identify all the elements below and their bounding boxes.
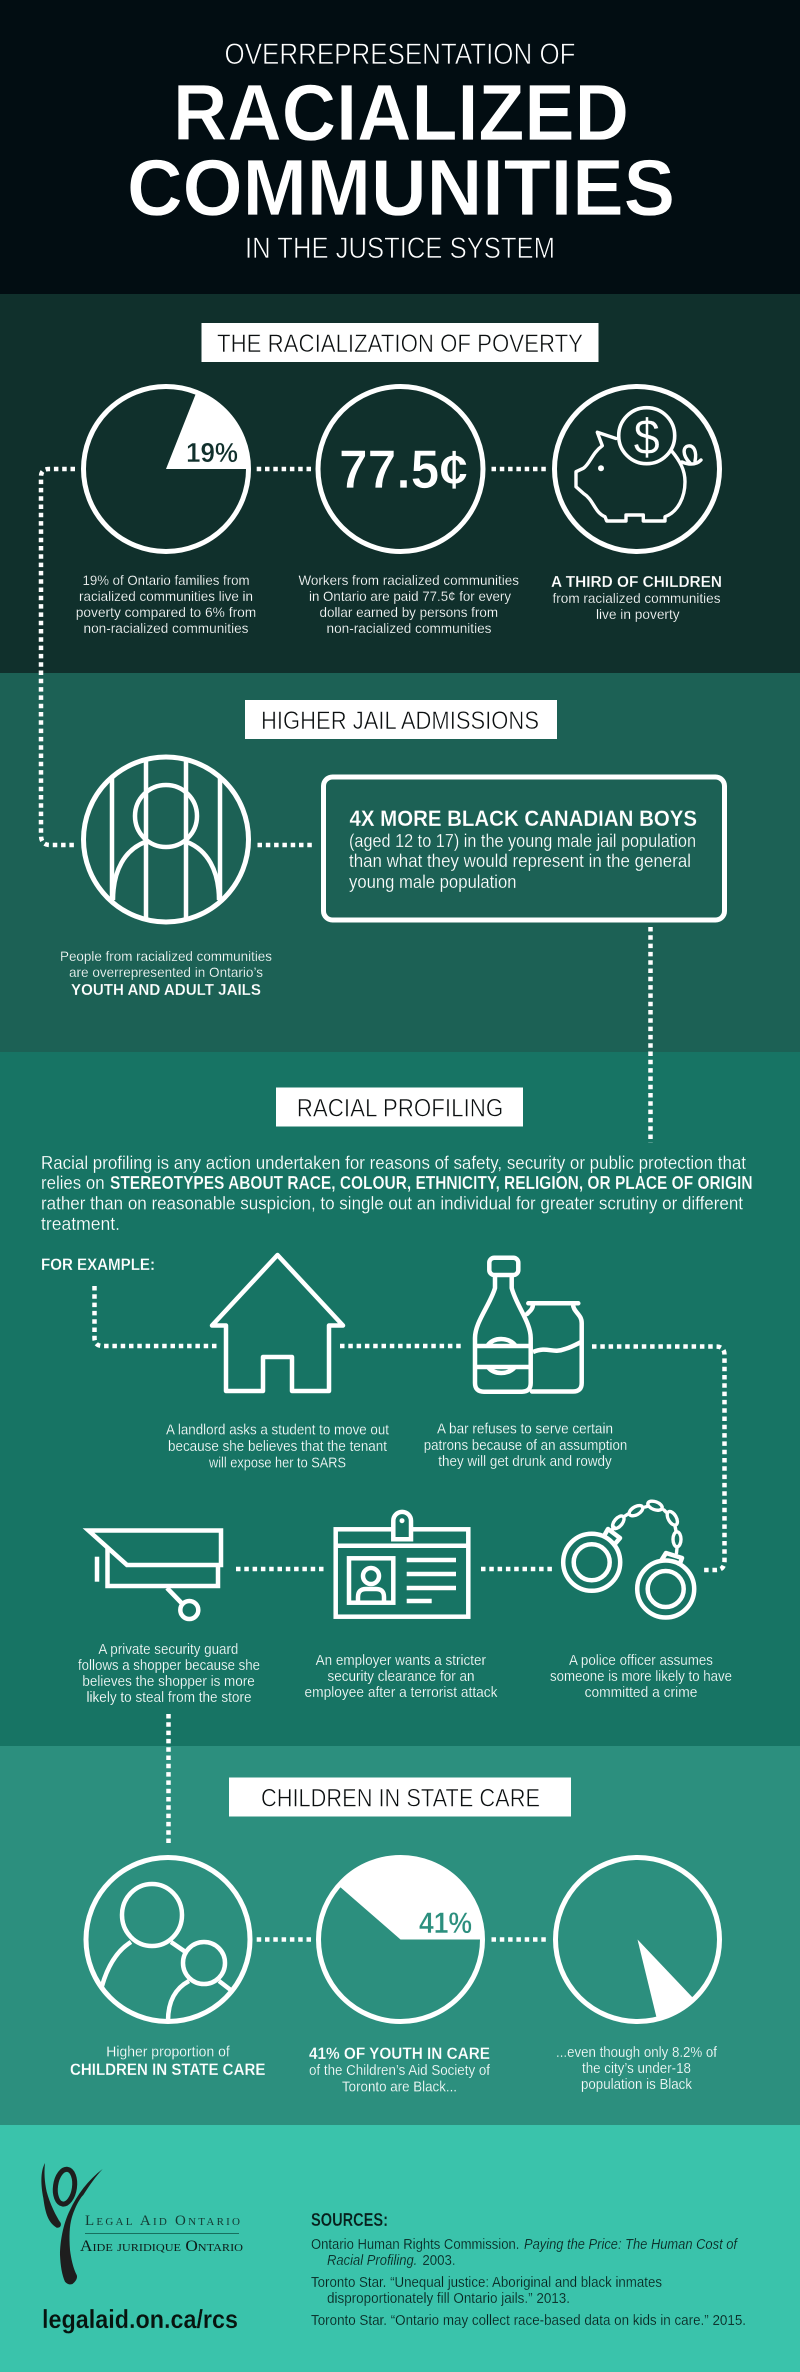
sources list: Toronto Star. “Ontario may collect race-based data on kids in care.” 2015. — [311, 2312, 746, 2329]
circle: 77.5 cents: 77.5¢ — [339, 438, 468, 500]
text: 8.2% of under-18 population: the city’s under-18 — [582, 2060, 691, 2077]
logo: legal aid ontario: Aide juridique Ontario — [80, 2238, 243, 2255]
heading: racial profiling — [276, 1088, 523, 1126]
pie chart: 41% — [318, 1858, 482, 2022]
sources list: Toronto Star. “Unequal justice: Aboriginal and black inmates — [311, 2274, 662, 2291]
text: landlord example — [166, 1422, 390, 1472]
text: workers paid 77.5 cents: in Ontario are paid 77.5¢ for every — [309, 588, 511, 604]
text: racial profiling definition: Racial profiling is any action undertaken for reasons of safety, security or public protection that — [41, 1153, 746, 1173]
callout: 4x more black canadian boys: than what they would represent in the general — [349, 851, 691, 871]
text: 41% of youth in care: of the Children’s Aid Society of — [309, 2062, 491, 2079]
text: employer example: security clearance for an — [328, 1668, 474, 1685]
text: bar example: A bar refuses to serve certain — [437, 1420, 613, 1438]
sources list: SOURCES: — [311, 2210, 388, 2230]
connector: house to bottle — [340, 1344, 463, 1348]
text: overrepresented in jails: are overrepresented in Ontario’s — [69, 964, 263, 980]
connector: callout down to racial profiling — [648, 927, 653, 1143]
sources list — [311, 2210, 746, 2329]
text: a third of children: from racialized communities — [552, 590, 720, 606]
text: bar example — [424, 1420, 627, 1470]
sources list: Ontario Human Rights Commission. — [311, 2236, 519, 2253]
text: workers paid 77.5 cents: non-racialized communities — [326, 620, 492, 636]
heading: children in state care — [229, 1778, 571, 1816]
text: workers paid 77.5 cents: Workers from racialized communities — [298, 572, 519, 588]
heading: children in state care: CHILDREN IN STATE CARE — [261, 1784, 540, 1812]
text: 41% of youth in care: 41% OF YOUTH IN CARE — [309, 2044, 490, 2063]
text: overrepresented in jails: People from racialized communities — [60, 948, 272, 964]
heading: higher jail admissions — [245, 700, 557, 739]
connector: adult circle to 41% circle — [257, 1937, 312, 1942]
icon: piggy bank: $ — [634, 409, 660, 465]
text: 41% of youth in care — [309, 2044, 491, 2096]
icon: bottle and can — [475, 1258, 582, 1392]
sources list: disproportionately fill Ontario jails.” 2013. — [327, 2290, 570, 2307]
text: workers paid 77.5 cents: dollar earned by persons from — [319, 604, 498, 620]
text: racial profiling definition: rather than on reasonable suspicion, to single out an individual for greater scrutiny or different — [41, 1194, 743, 1214]
title line: overrepresentation of: OVERREPRESENTATION OF — [224, 38, 576, 71]
text: employer example: employee after a terrorist attack — [304, 1684, 498, 1701]
text: 19 percent of families: non-racialized communities — [84, 620, 248, 636]
text: police example: someone is more likely to have — [550, 1668, 732, 1685]
connector: jail circle to callout — [258, 843, 313, 847]
logo: legal aid ontario — [41, 2163, 243, 2284]
text: racial profiling definition: relies on — [41, 1173, 105, 1193]
connector: poverty circle down to jail circle — [41, 469, 76, 845]
text: higher proportion: CHILDREN IN STATE CARE — [70, 2060, 265, 2079]
sources list: Paying the Price: The Human Cost of — [524, 2236, 739, 2253]
panel: higher jail admissions — [0, 673, 800, 1052]
text: a third of children — [551, 574, 722, 622]
text: employer example: An employer wants a stricter — [316, 1652, 486, 1669]
text: bar example: patrons because of an assumption — [424, 1437, 627, 1454]
panel: title header — [0, 0, 800, 294]
panel: racial profiling — [0, 1052, 800, 1746]
text: landlord example: will expose her to SARS — [208, 1454, 346, 1472]
heading: higher jail admissions: HIGHER JAIL ADMISSIONS — [261, 707, 539, 735]
connector: circle one to two — [257, 467, 312, 471]
panel: the racialization of poverty — [0, 294, 800, 673]
text: landlord example: because she believes that the tenant — [168, 1438, 388, 1455]
text: higher proportion — [70, 2044, 265, 2079]
callout: 4x more black canadian boys: 4X MORE BLACK CANADIAN BOYS — [350, 806, 697, 831]
icon: id card — [336, 1512, 468, 1617]
text: security guard example: A private security guard — [98, 1641, 238, 1658]
text: racial profiling definition — [41, 1153, 752, 1234]
icon: house — [212, 1255, 343, 1391]
connector: circle two to three — [492, 467, 547, 471]
text: a third of children: live in poverty — [596, 606, 680, 622]
text: employer example — [304, 1652, 498, 1701]
heading: racial profiling: RACIAL PROFILING — [297, 1094, 503, 1122]
callout: 4x more black canadian boys — [324, 777, 724, 920]
panel: children in state care — [0, 1746, 800, 2125]
connector: security guard caption down to state care — [166, 1714, 171, 1846]
connector: id card to handcuffs — [481, 1567, 553, 1571]
text: 8.2% of under-18 population — [556, 2044, 718, 2093]
text: security guard example — [78, 1641, 260, 1706]
heading: the racialization of poverty — [202, 323, 598, 362]
sources list: 2003. — [422, 2252, 456, 2269]
text: police example: committed a crime — [585, 1684, 697, 1701]
text: 19 percent of families: 19% of Ontario families from — [82, 572, 250, 588]
pie chart: 19%: 19% — [186, 437, 238, 468]
pie chart: 19% — [84, 386, 248, 552]
label: for example: FOR EXAMPLE: — [41, 1255, 155, 1274]
icon: adult and child — [86, 1858, 250, 2022]
text: 8.2% of under-18 population: ...even though only 8.2% of — [556, 2044, 718, 2061]
text: 19 percent of families: racialized communities live in — [79, 588, 253, 604]
icon: piggy bank — [554, 386, 720, 552]
pie chart: 41%: 41% — [419, 1907, 472, 1940]
text: security guard example: follows a shopper because she — [78, 1657, 260, 1674]
text: overrepresented in jails: YOUTH AND ADULT JAILS — [71, 982, 261, 999]
icon: handcuffs — [563, 1499, 694, 1618]
text: overrepresented in jails — [60, 948, 272, 999]
callout: 4x more black canadian boys: (aged 12 to 17) in the young male jail population — [349, 831, 696, 851]
title line: in the justice system: IN THE JUSTICE SYSTEM — [245, 232, 555, 265]
text: security guard example: believes the shopper is more — [82, 1673, 255, 1690]
connector: bottle to handcuffs — [592, 1346, 724, 1570]
callout: 4x more black canadian boys: young male population — [349, 872, 516, 892]
title line: racialized: RACIALIZED — [173, 68, 629, 157]
connector: for example to house — [94, 1286, 220, 1346]
connector: camera to id card — [236, 1567, 325, 1571]
link: legalaid.on.ca/rcs: legalaid.on.ca/rcs — [42, 2304, 238, 2334]
text: bar example: they will get drunk and rowdy — [438, 1453, 612, 1470]
text: 8.2% of under-18 population: population is Black — [581, 2076, 692, 2093]
sources list: Racial Profiling. — [327, 2252, 417, 2269]
text: a third of children: A THIRD OF CHILDREN — [551, 574, 722, 591]
circle: 77.5 cents — [318, 386, 483, 552]
text: 41% of youth in care: Toronto are Black... — [342, 2078, 457, 2096]
title line: communities: COMMUNITIES — [127, 143, 675, 232]
text: police example: A police officer assumes — [569, 1652, 713, 1669]
icon: person behind bars — [84, 757, 248, 922]
text: higher proportion: Higher proportion of — [106, 2044, 231, 2060]
text: police example — [550, 1652, 732, 1701]
panel: footer — [0, 2125, 800, 2372]
connector: 41% circle to 8.2% circle — [492, 1937, 547, 1942]
text: racial profiling definition: treatment. — [41, 1214, 120, 1234]
text: security guard example: likely to steal from the store — [86, 1689, 252, 1706]
pie chart: 8.2% — [556, 1858, 720, 2022]
text: 19 percent of families: poverty compared to 6% from — [76, 604, 256, 620]
text: workers paid 77.5 cents — [298, 572, 519, 636]
heading: the racialization of poverty: THE RACIALIZATION OF POVERTY — [217, 330, 583, 358]
text: 19 percent of families — [76, 572, 256, 636]
icon: security camera — [88, 1530, 221, 1619]
text: landlord example: A landlord asks a student to move out — [166, 1422, 390, 1438]
logo: legal aid ontario: Legal Aid Ontario — [85, 2213, 240, 2229]
